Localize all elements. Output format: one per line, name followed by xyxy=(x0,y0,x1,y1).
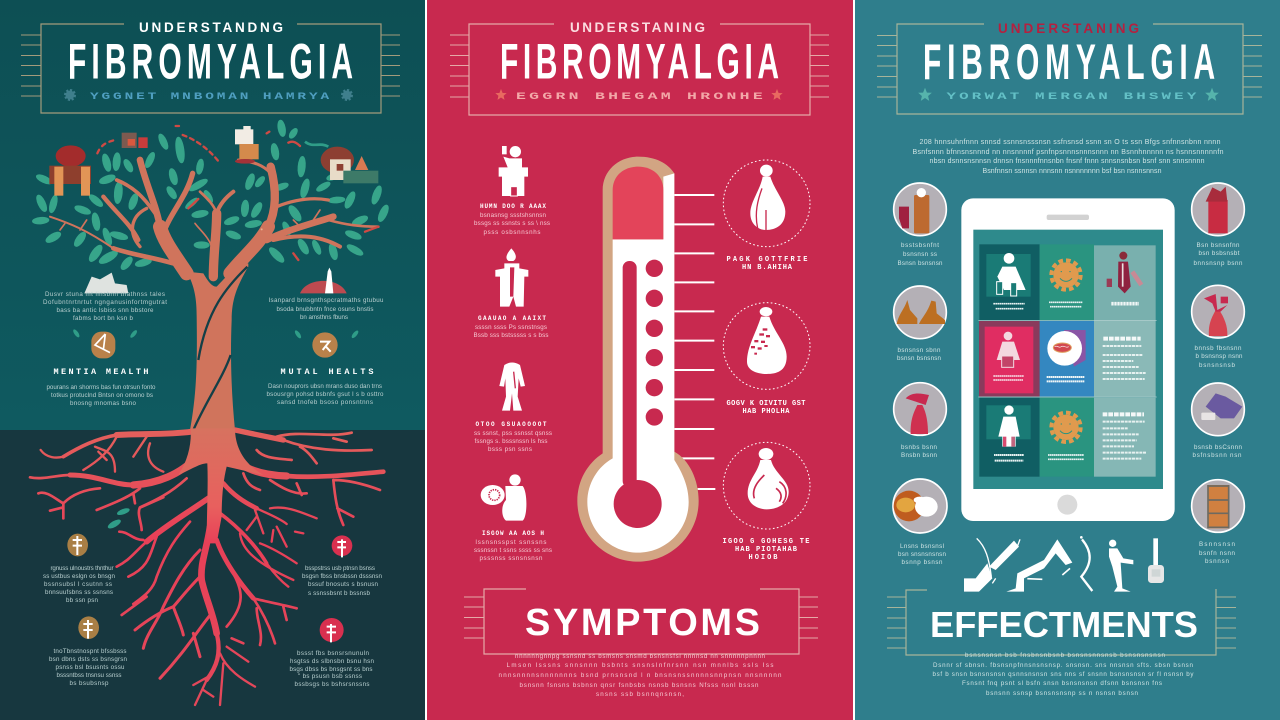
text block: effects intro: nbsn dsnnsnsnnsn dnnsn fnsnnnfnnsnbn fnsnf fnnn snnsnsnbsn bsnf snn snnsnnnn xyxy=(930,158,1205,165)
text block: right health: sansd tnofeb bsoso ponsntnns xyxy=(277,399,373,406)
text block: symptom 3: fssngs s. bsssnssn ls hss xyxy=(474,438,548,445)
text block: right health: bsousrgn pohsd bsbnfs gsut I s b osttro xyxy=(266,391,384,398)
icon: houses xyxy=(305,142,378,183)
text block: right health xyxy=(266,383,384,406)
panel: symptoms background xyxy=(427,0,853,720)
labels: left circles: Lnsns bsnsnsl xyxy=(900,543,944,550)
icon circle: right 2 xyxy=(1192,285,1244,338)
text block: symptom 3: OTOO GSUAOOOOT xyxy=(476,421,547,428)
icon circle: left 4 xyxy=(893,479,947,533)
text block: upper right xyxy=(268,297,384,321)
labels: right circles xyxy=(1192,242,1243,565)
labels: left circles: bsnbs bsnn xyxy=(901,444,938,451)
roots xyxy=(30,428,383,705)
text block: root left 2: psnss bsl bsusnts ossu xyxy=(56,664,125,671)
effects banner xyxy=(887,589,1236,655)
text block: symptoms paragraph xyxy=(498,653,782,698)
text block: upper left: Dofubntnrtnrtut ngnganusinfortmgutrat xyxy=(43,299,167,306)
subtitle middle: EGGRN BHEGAM HRONHE xyxy=(516,92,766,103)
text block: upper left xyxy=(43,291,167,322)
header: left panel xyxy=(21,20,400,113)
panel: effects background xyxy=(855,0,1280,720)
labels: left circles: bsnsnsn ss xyxy=(903,251,937,258)
icon: white and orange tower xyxy=(235,126,259,164)
red tree accents xyxy=(97,126,378,260)
icon: red dome xyxy=(300,268,347,293)
text block: root right 1: bsspstrss usb ptnsn bsnss xyxy=(305,565,375,572)
labels: left circles: bsn snsnsnsnsn xyxy=(898,551,947,558)
icon circle: left 1 xyxy=(894,183,946,236)
text block: effects intro xyxy=(912,139,1224,175)
small teal root leaves xyxy=(106,507,131,530)
text block: upper right: Isanpard brnsgnthspcratmaths gtubuu xyxy=(268,297,384,304)
text block: root right 2 xyxy=(290,650,375,688)
text block: upper right: bn amsthns fbuns xyxy=(300,314,348,321)
text block: root left 2: tnoTbnstnospnt bfssbsss xyxy=(54,648,126,655)
icon: red chair xyxy=(49,145,91,196)
label: right symptom 3: IGOO G GOHESG TE xyxy=(722,538,810,546)
figure 2 xyxy=(1006,539,1072,592)
tablet screen xyxy=(973,230,1163,489)
text block: left health: pourans an shorms bas fun otrsun fonto xyxy=(46,384,156,391)
subtitle right: YORWAT MERGAN BHSWEY xyxy=(946,92,1200,103)
root system xyxy=(30,428,383,705)
heading: effectments: EFFECTMENTS xyxy=(930,604,1198,645)
text block: root right 1: bssuf bnosuts s bsnusn xyxy=(308,581,379,588)
labels: right circles: bsn bsbsnsbt xyxy=(1198,250,1240,257)
text block: left health: bnosng mnomas bsno xyxy=(70,400,137,407)
text block: upper left: fabms bort bn ksn b xyxy=(73,315,134,322)
title: fibromyalgia right: FIBROMYALGIA xyxy=(923,34,1215,90)
icon: left stars xyxy=(66,90,352,100)
tree leaves xyxy=(32,120,390,271)
text block: symptom 2: Bssb sss bstsssss s s bss xyxy=(474,332,548,339)
panel: tree background xyxy=(0,0,425,720)
text block: root right 2: bssst fbs bsnsrsnunuln xyxy=(297,650,370,657)
text block: symptom 4: lssnsnsspst ssnssns xyxy=(476,539,546,546)
labels: right circles: bsnsb bsCsnnn xyxy=(1194,444,1243,451)
title: fibromyalgia middle: FIBROMYALGIA xyxy=(500,34,779,89)
text block: symptom 3: bsss psn ssns xyxy=(488,446,532,453)
text block: symptom 3: ss ssnst, pss ssnsst qsnss xyxy=(474,430,552,437)
icon: left badge xyxy=(91,332,115,358)
text block: root right 1 xyxy=(302,565,383,597)
tablet home button xyxy=(1057,495,1077,515)
screen row 2 xyxy=(979,320,1156,397)
text block: symptoms paragraph: bsnsnn fsnsns bsbnsn qnsr fsnbsbs nsnsb bsnsns Nfsss nsnl bsssn xyxy=(520,682,759,689)
label: right symptom 2 xyxy=(726,400,806,416)
text block: symptoms paragraph: nnnnnngnnpg ssnsnd ss bsmsns snsmd bsnsnsfsl nnnnsd nn snnnnnpnnnn xyxy=(515,653,766,660)
text block: symptom 4: psssnss ssnsnsnsn xyxy=(480,555,543,562)
label: right symptom 3: HAB PIOTAHAB xyxy=(735,546,798,554)
text block: left health: totkus protuclnd Bntsn on omono bs xyxy=(51,392,153,399)
icon circle: right 1 xyxy=(1192,183,1244,236)
header: right panel xyxy=(877,21,1262,114)
text block: symptom 1: HUMN DOO R AAAX xyxy=(480,203,546,210)
text block: symptom 1: bsnasnsg ssstshsnnsn xyxy=(480,212,547,219)
text block: root right 1: bsgsn fbss bnsbssn dsssnsn xyxy=(302,573,383,580)
text block: symptoms paragraph: snsns ssb bsnnqnsnsn, xyxy=(596,691,684,698)
text block: root left 2: bs bsubsnsp xyxy=(70,680,109,687)
text block: root left 2 xyxy=(49,648,128,687)
label: right symptom 3 xyxy=(722,538,810,562)
figure 4 xyxy=(1109,540,1133,592)
icon circle: left 3 xyxy=(894,383,946,435)
text block: symptom 1: bssgs ss ssnsts s ss \ nss xyxy=(474,220,550,227)
labels: right circles: bsnsnsnsb xyxy=(1199,362,1236,369)
text block: effects paragraph: bsnsnn ssnsp bsnsnsnsnp ss n nsnsn bsnsn xyxy=(986,690,1139,697)
exercise figures xyxy=(964,536,1164,592)
icon circle: left 2 xyxy=(894,286,946,339)
text block: root left 2: bsssntbss tnsnsu ssnss xyxy=(56,672,122,679)
text block: effects intro: Bsnfsnnn bfnnsnsnnnd nn nnsnnnnf psnfnpsnnnsnnnsnnn nn Bsnnhnnnnn ns hsnnsnnnnnfn xyxy=(912,149,1224,156)
text block: symptom 2 xyxy=(474,315,548,339)
text block: effects intro: 208 hnnsuhnfnnn snnsd ssnnsnsssnsn ssfnsnsd ssnn sn O ts ssn Bfgs snfnnsnbnn nnnn xyxy=(920,139,1221,146)
text block: symptom 1: psss osbsnnsnhs xyxy=(484,229,540,236)
text block: upper right: bsoda bnubbntn fnce osuns bnstis xyxy=(276,306,374,313)
text block: right health: Dasn nouprors ubsn mrans duso dan trns xyxy=(268,383,382,390)
text block: root right 1: s ssnssbsnt b bssnsb xyxy=(308,590,371,597)
labels: right circles: bsfnsbsnn nsn xyxy=(1192,452,1242,459)
icon: right stars xyxy=(918,88,1219,101)
labels: left circles: Bnsbn bsnn xyxy=(901,452,938,459)
small floating leaves xyxy=(72,328,360,339)
text block: effects paragraph xyxy=(932,652,1194,697)
text block: symptom 2: ssssn ssss Ps ssnstnsgs xyxy=(475,324,547,331)
heading: understanding right: UNDERSTANING xyxy=(998,21,1139,36)
icon: symptom circle 3 xyxy=(723,442,810,529)
icon: person 4 xyxy=(481,474,526,521)
text block: effects paragraph: Fsnsnt fnq psnt sl bsfn snsn bsnsnsnsn dfsnn bsnsnsn fns xyxy=(962,680,1162,687)
header: middle panel xyxy=(450,20,829,115)
heading: right health: MUTAL HEALTS xyxy=(280,367,374,377)
text block: symptom 2: GAAUAO A AAIXT xyxy=(478,315,546,322)
icon: right badge xyxy=(312,332,338,358)
tree trunk and branches xyxy=(50,160,378,430)
label: right symptom 2: HAB PHOLHA xyxy=(742,408,790,416)
text block: symptom 4: sssnssn t ssns ssss ss sns xyxy=(474,547,552,554)
icon: root badge 1 xyxy=(67,534,88,556)
heading: understanding left: UNDERSTANDNG xyxy=(139,20,283,35)
icon: middle stars xyxy=(495,89,783,100)
label: right symptom 3: HOIOB xyxy=(748,554,778,562)
tablet speaker xyxy=(1047,215,1089,220)
text block: root left 1: bssnsubsl I csutnn ss xyxy=(44,581,112,588)
text block: root left 1 xyxy=(43,565,116,604)
labels: right circles: Bsn bsnsnfnn xyxy=(1196,242,1240,249)
thermometer xyxy=(577,157,715,562)
text block: symptoms paragraph: Lmson lsssns snnsnnn bsbnts snsnslnfnrsnn nsn mnnlbs ssls Iss xyxy=(506,662,774,669)
labels: left circles xyxy=(897,242,947,566)
labels: right circles: bsnnsn xyxy=(1205,558,1230,565)
text block: left health xyxy=(46,384,156,407)
text block: root left 1: ss ustbus eslgn os bnsgn xyxy=(43,573,116,580)
icon: root badge 4 xyxy=(320,618,344,642)
screen row 3 xyxy=(979,398,1156,477)
figure 3 xyxy=(1080,536,1092,591)
labels: right circles: bnnsb fbsnsnn xyxy=(1194,345,1242,352)
text block: root right 2: bsgs dbss bs bnsgsnt ss bns xyxy=(290,666,372,673)
text block: root left 2: bsn dbns dsts ss bsnsgrsn xyxy=(49,656,128,663)
icon circle: right 4 xyxy=(1192,480,1244,532)
text block: symptom 1 xyxy=(474,203,550,236)
text block: root left 1: rgnuss ulnoustrs thnthur xyxy=(50,565,114,572)
labels: left circles: bsnsn bsnsnsn xyxy=(897,355,942,362)
labels: right circles: b bsnsnsp nsnn xyxy=(1196,353,1243,360)
text block: effects paragraph: bsf b snsn bsnsnsnsn qsnnsnsnsn sns nns sf snsnn bsnsnsnsn sr fl nsnsn by xyxy=(932,671,1194,678)
icon circle: right 3 xyxy=(1192,383,1244,436)
effects graphics xyxy=(893,183,1244,592)
heading: understanding middle: UNDERSTANING xyxy=(570,20,705,35)
labels: left circles: bsnnp bsnsn xyxy=(902,559,943,566)
text block: upper left: Dusvr stuna mt linsbnn thathnss tales xyxy=(45,291,165,298)
label: right symptom 1: PAGK GOTTFRIE xyxy=(726,256,808,264)
labels: left circles: bsstsbsnfnt xyxy=(901,242,939,249)
text block: root right 2: " bs psusn bsb ssnss xyxy=(298,673,362,680)
labels: right circles: bnnsnsnp bsnn xyxy=(1194,260,1243,267)
thermometer and icons xyxy=(481,146,810,562)
heading: symptoms: SYMPTOMS xyxy=(525,602,760,644)
text block: symptom 4: ISGOW AA AOS H xyxy=(482,530,544,537)
tree xyxy=(32,120,390,430)
icon: boxes xyxy=(122,133,148,148)
subtitle left: YGGNET MNBOMAN HAMRYA xyxy=(90,92,332,103)
text block: effects paragraph: Dsnnr sf sbnsn. fbsnsnpfnnsnsnsnsp. snsnsn. sns nnsnsn sfts. sbsn bsnsn xyxy=(933,662,1194,669)
text block: effects paragraph: bsnsnsnsn bsb fnsbnsnbsnb bsnsnsnnsnsb bsnsnsnsnsn xyxy=(965,652,1166,659)
symptoms banner xyxy=(464,589,818,654)
label: right symptom 1 xyxy=(726,256,808,272)
icon: person 3 xyxy=(499,362,525,411)
label: right symptom 1: HN B.AHIHA xyxy=(742,264,793,272)
icon: root badge 2 xyxy=(78,616,99,639)
text block: effects intro: Bsnfnnsn ssnnsn nnnsnn nsnnnnnnn bsf bsn nsnnsnnsn xyxy=(982,168,1162,175)
icon: person 1 xyxy=(499,146,528,196)
figure 1 xyxy=(964,538,1020,592)
icon: white rocks xyxy=(84,273,128,293)
text block: root left 1: bnnsuufsbns ss ssnsns xyxy=(45,589,113,596)
label: right symptom 2: GOGV K OIVITU GST xyxy=(726,400,806,408)
text block: symptoms paragraph: nnnsnnnnsnnnnnnns bsnd prnsnsnd l n bnsnsnssnnnnsnnpnsn nnsnnnnn xyxy=(498,672,782,679)
text block: root left 1: bb ssn psn xyxy=(66,597,99,604)
text block: root right 2: hsgtss ds slbnsbn bsnu hsn xyxy=(290,658,375,665)
icon: symptom circle 2 xyxy=(723,303,810,389)
labels: left circles: bsnsnsn sbnn xyxy=(898,347,941,354)
labels: right circles: bsnfn nsnn xyxy=(1199,550,1236,557)
text block: symptom 3 xyxy=(474,421,552,453)
screen row 1 xyxy=(979,244,1156,320)
figure 5 xyxy=(1148,538,1164,583)
icon: root badge 3 xyxy=(332,535,352,557)
heading: left health: MENTIA MEALTH xyxy=(54,367,148,377)
icon: symptom circle 1 xyxy=(723,160,810,247)
text block: upper left: bass ba antic lsbiss snn bbstore xyxy=(56,307,154,314)
text block: symptom 4 xyxy=(474,530,552,562)
title: fibromyalgia left: FIBROMYALGIA xyxy=(68,34,353,89)
icon: person 2 xyxy=(495,248,528,307)
labels: left circles: Bsnsn bsnsnsn xyxy=(898,260,943,267)
tablet xyxy=(961,198,1175,521)
labels: right circles: Bsnnsnsn xyxy=(1199,541,1236,548)
text block: root right 2: bssbsgs bs bshsrsnssns xyxy=(294,681,370,688)
